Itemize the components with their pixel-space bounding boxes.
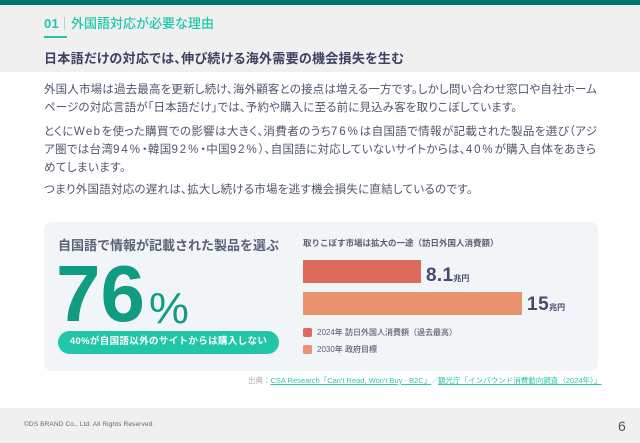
big number 76%: 76 xyxy=(56,249,145,338)
section heading: 外国語対応が必要な理由 xyxy=(71,16,214,31)
legend 2024: 2024年 訪日外国人消費額（過去最高） xyxy=(317,328,457,337)
section heading: 01 xyxy=(44,16,59,31)
source note: ／ xyxy=(431,376,438,385)
source note xyxy=(248,376,602,385)
source note: 観光庁「インバウンド消費動向調査（2024年）」 xyxy=(438,376,601,385)
top bar xyxy=(0,0,640,5)
source note: 出典：CSA Research「Can't Read, Won't Buy - B2C」 xyxy=(248,376,431,385)
value 15: 15兆円 xyxy=(527,294,565,315)
legend 2030: 2030年 政府目標 xyxy=(317,345,377,354)
pill callout xyxy=(58,331,279,354)
heading underline xyxy=(44,36,67,38)
big number 76% xyxy=(56,249,189,338)
body text: ア圏では台湾94%・韓国92%・中国92%）、自国語に対応していないサイトからは、40%が購入自体をあきら xyxy=(44,144,596,156)
body text: ページの対応言語が「日本語だけ」では、予約や購入に至る前に見込み客を取りこぼしています。 xyxy=(44,102,517,114)
value 8.1: 8.1兆円 xyxy=(426,265,469,286)
bar chart xyxy=(303,238,565,354)
pill callout: 40%が自国語以外のサイトからは購入しない xyxy=(70,336,267,347)
body text: つまり外国語対応の遅れは、拡大し続ける市場を逃す機会損失に直結しているのです。 xyxy=(44,184,473,196)
footer band xyxy=(0,408,640,443)
header band xyxy=(0,0,640,72)
body text xyxy=(44,83,597,196)
bar 2024 xyxy=(303,260,421,283)
body text: めてしまいます。 xyxy=(44,162,126,174)
body text: 外国人市場は過去最高を更新し続け、海外顧客との接点は増える一方です。しかし問い合わせ窓口や自社ホーム xyxy=(44,84,597,96)
main title: 日本語だけの対応では、伸び続ける海外需要の機会損失を生む xyxy=(44,51,404,66)
page number: 6 xyxy=(618,418,626,434)
stat caption: 自国語で情報が記載された製品を選ぶ xyxy=(58,238,279,253)
stats panel xyxy=(44,222,598,371)
chart title: 取りこぼす市場は拡大の一途（訪日外国人消費額） xyxy=(303,238,499,248)
copyright: ©DS BRAND Co., Ltd. All Rights Reserved. xyxy=(24,421,154,428)
left stat block xyxy=(56,238,279,354)
bar 2030 xyxy=(303,292,522,315)
body text: とくにWebを使った購買での影響は大きく、消費者のうち76%は自国語で情報が記載された製品を選び（アジ xyxy=(44,126,597,138)
big number 76%: % xyxy=(149,284,189,333)
